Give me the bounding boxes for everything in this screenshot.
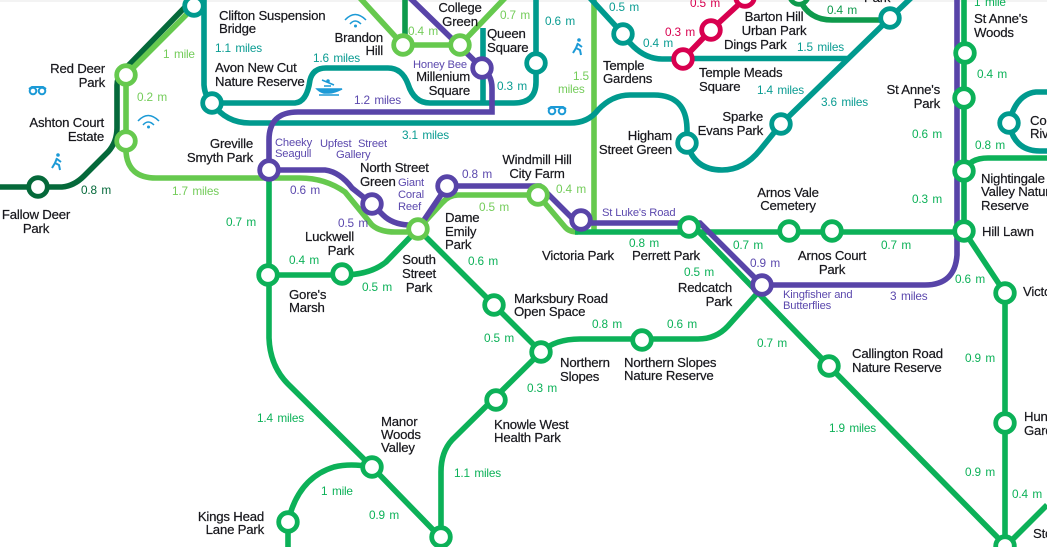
distances: light green: 1.5	[573, 69, 589, 83]
station: Arnos Court Park: Park	[819, 262, 846, 277]
station: Conham River (cropped)	[1000, 113, 1047, 141]
distances: green: 0.5 m	[362, 280, 392, 294]
station: Arnos Vale Cemetery: Arnos Vale	[757, 185, 819, 200]
icon: binoculars	[548, 107, 566, 114]
station: Redcatch Park	[678, 276, 771, 309]
distances: purple: 1.2 miles	[354, 93, 401, 107]
distances: green: 0.5 m	[684, 265, 714, 279]
icon: binoculars	[29, 87, 46, 94]
station: Northern Slopes: Slopes	[560, 369, 600, 384]
station: Fallow Deer Park	[2, 178, 71, 236]
station: Victoria Park: Victoria Park	[542, 248, 615, 263]
station: Sparke Evans Park: Evans Park	[698, 123, 764, 138]
line: green Manor Woods loop	[288, 465, 372, 547]
station: Higham Street Green	[599, 128, 696, 157]
station: Barton Hill Urban Park: Barton Hill	[745, 9, 804, 24]
distances: purple: 0.6 m	[290, 183, 320, 197]
station: Clifton Suspension Bridge: Bridge	[219, 21, 256, 36]
station: Millenium Square: Millenium	[416, 69, 470, 84]
station: Avon New Cut Nature Reserve: Avon New Cut	[215, 60, 297, 75]
station: Northern Slopes Nature Reserve: Nature Reserve	[624, 368, 714, 383]
station: Victoria Park	[542, 211, 615, 263]
distances: teal: 0.4 m	[643, 36, 673, 50]
station: Greville Smyth Park	[187, 136, 278, 179]
distances: teal: 3.6 miles	[821, 95, 868, 109]
line: green Greville to Bottom	[269, 170, 443, 540]
distances: green: 0.8 m	[975, 138, 1005, 152]
line: green Gore's to South Street	[269, 229, 541, 352]
distances: purple: 0.8 m	[462, 167, 492, 181]
distances: dark green: 0.4 m	[827, 3, 857, 17]
wildlife label: Giant Coral Reef: Reef	[398, 201, 422, 213]
distances: green: 0.6 m	[667, 317, 697, 331]
station: Marksbury Road Open Space: Open Space	[514, 304, 585, 319]
station: Callington Road Nature Reserve: Nature Reserve	[852, 360, 942, 375]
distances: green: 0.7 m	[733, 238, 763, 252]
station: Windmill Hill City Farm: Windmill Hill	[502, 152, 572, 167]
distances: green: 1.4 miles	[257, 411, 304, 425]
distances: green: 0.9 m	[369, 508, 399, 522]
station: Greville Smyth Park: Greville	[210, 136, 253, 151]
wildlife label: Upfest Street Gallery: Gallery	[336, 149, 371, 161]
line: green Nightingale branch	[964, 158, 1047, 171]
station: Marksbury Road Open Space	[485, 291, 608, 319]
distances: purple: 0.5 m	[338, 216, 368, 230]
station: Arnos Vale Cemetery: Cemetery	[760, 198, 816, 213]
station: Ashton Court Estate: Estate	[68, 129, 104, 144]
station: St Anne's Woods	[956, 11, 1028, 62]
wildlife label: Giant Coral Reef: Coral	[398, 189, 424, 201]
icon: wifi	[138, 116, 159, 128]
station: College Green	[438, 0, 482, 54]
station: Manor Woods Valley: Valley	[381, 440, 415, 455]
distances: teal: 0.6 m	[545, 14, 575, 28]
wildlife label: Honey Bee: Honey Bee	[413, 59, 467, 71]
icon: walking person	[573, 38, 582, 55]
distances: light green: 1.7 miles	[172, 184, 219, 198]
line: dark green Brandon Hill spur	[402, 0, 408, 45]
line: teal Coombe river	[1009, 92, 1047, 151]
station: Nightingale Valley Nature Reserve: Reserve	[981, 198, 1029, 213]
station: Luckwell Park: Park	[328, 243, 355, 258]
line: green lower right diagonal	[1005, 505, 1047, 547]
station: North Street Green: Green	[360, 174, 396, 189]
station: Hill Lawn	[955, 222, 1034, 240]
distances: green: 0.6 m	[955, 272, 985, 286]
wildlife label: Cheeky Seagull: Cheeky	[275, 137, 313, 149]
station: St Anne's Park	[886, 82, 973, 111]
icon: wifi	[345, 14, 366, 28]
station: Perrett Park: Perrett Park	[632, 248, 701, 263]
distances: light green: miles	[558, 82, 585, 96]
distances: crimson: 0.3 m	[665, 25, 695, 39]
station: Millenium Square	[416, 59, 491, 98]
station: Dame Emily Park	[438, 177, 479, 252]
station: Manor Woods Valley: Manor	[381, 414, 418, 429]
station: Kings Head Lane Park: Kings Head	[198, 509, 264, 524]
station: Arnos Court Park: Arnos Court	[798, 248, 867, 263]
station: Redcatch Park: Redcatch	[678, 280, 732, 295]
station: Kings Head Lane Park: Lane Park	[206, 522, 265, 537]
station: South Street Park: South	[402, 252, 436, 267]
station: Avon New Cut Nature Reserve	[203, 60, 305, 112]
station: Red Deer Park: Red Deer	[50, 61, 106, 76]
station: top mid-green node	[790, 0, 808, 4]
station: Dings Park	[702, 21, 787, 52]
station: Luckwell Park	[305, 229, 355, 283]
distances: green: 0.4 m	[1012, 487, 1042, 501]
station: South Street Park	[402, 220, 437, 295]
line: teal Temple Gardens	[590, 0, 683, 59]
station: Sparke Evans Park: Sparke	[722, 109, 763, 124]
station: Marksbury Road Open Space: Marksbury Road	[514, 291, 608, 306]
distances: green: 0.7 m	[881, 238, 911, 252]
distances: green: 0.7 m	[757, 336, 787, 350]
distances: green: 0.3 m	[912, 192, 942, 206]
station: Fallow Deer Park: Fallow Deer	[2, 207, 71, 222]
distances: light green	[137, 8, 589, 214]
line: dark green	[0, 2, 190, 187]
distances: green: 0.7 m	[226, 215, 256, 229]
line: light green Red Deer branch	[126, 4, 578, 232]
station: Gore's Marsh: Marsh	[289, 300, 325, 315]
wildlife label: Upfest Street Gallery: Street	[358, 138, 388, 150]
station: Luckwell Park: Luckwell	[305, 229, 354, 244]
station: Queen Square: Queen	[487, 26, 526, 41]
distances: light green: 0.4 m	[556, 182, 586, 196]
icon: kayak	[317, 79, 342, 95]
line: crimson	[683, 0, 750, 59]
wildlife label: St Luke's Road: St Luke's Road	[602, 207, 675, 219]
distances: green: 1.9 miles	[829, 421, 876, 435]
station: Knowle West Health Park: Health Park	[494, 430, 561, 445]
station: Higham Street Green: Street Green	[599, 142, 672, 157]
station: North Street Green: North Street	[360, 160, 429, 175]
station: Kings Head Lane Park	[198, 509, 297, 537]
distances: teal	[215, 0, 868, 142]
station: Northern Slopes Nature Reserve: Northern Slopes	[624, 355, 717, 370]
wildlife label: Giant Coral Reef	[398, 177, 425, 213]
line: teal long route	[212, 0, 912, 170]
line: green Knowle West	[441, 352, 541, 537]
distances: green: 0.9 m	[965, 465, 995, 479]
distances: green: 1 mile	[321, 484, 353, 498]
station: Arnos Vale Cemetery	[757, 185, 819, 240]
station: Northern Slopes	[532, 343, 610, 384]
station: Greville Smyth Park: Smyth Park	[187, 150, 254, 165]
line: light green vertical	[591, 0, 597, 232]
station: Brandon Hill: Brandon	[335, 30, 383, 45]
station: Dame Emily Park: Park	[445, 237, 472, 252]
distances: green	[226, 0, 1042, 522]
station: Callington Road Nature Reserve	[820, 346, 943, 375]
station: Temple Meads Square	[674, 50, 783, 94]
line: purple West	[269, 0, 957, 285]
station: Temple Meads Square: Temple Meads	[699, 65, 783, 80]
station: Temple Gardens: Temple	[603, 58, 644, 73]
distances: green: 0.8 m	[629, 236, 659, 250]
distances: teal: 1.1 miles	[215, 41, 262, 55]
station: Avon New Cut Nature Reserve: Nature Reserve	[215, 74, 305, 89]
wildlife label: Cheeky Seagull: Seagull	[275, 148, 311, 160]
station: Dame Emily Park: Emily	[445, 224, 477, 239]
wildlife label: Kingfisher and Butterflies: Kingfisher and	[783, 289, 852, 301]
distances: light green: 0.4 m	[408, 24, 438, 38]
line: green Perrett to Stockwood	[700, 233, 1005, 545]
station: Windmill Hill City Farm: City Farm	[509, 166, 565, 181]
station: lower junction	[432, 528, 450, 546]
distances: crimson	[665, 0, 720, 39]
station: Temple Meads Square: Square	[699, 79, 740, 94]
line: green Northern Slopes	[541, 288, 762, 352]
station: Knowle West Health Park: Knowle West	[494, 417, 569, 432]
station: Redcatch Park: Park	[706, 294, 733, 309]
distances: green: 0.6 m	[468, 254, 498, 268]
distances: green: 0.4 m	[289, 253, 319, 267]
station: Millenium Square: Square	[429, 83, 470, 98]
distances: light green: 0.5 m	[479, 200, 509, 214]
station: Arnos Court Park	[798, 222, 867, 277]
station: Stockwood (cropped)	[996, 526, 1047, 547]
station: Hungerford Gardens (cropped)	[996, 409, 1047, 438]
distances: purple: 3 miles	[890, 289, 928, 303]
station: Clifton Suspension Bridge	[185, 0, 325, 36]
wildlife label: Kingfisher and Butterflies: Butterflies	[783, 300, 832, 312]
station: St Anne's Park: St Anne's	[886, 82, 941, 97]
station: Dame Emily Park: Dame	[445, 210, 479, 225]
station: Perrett Park	[632, 218, 701, 263]
line: teal Clifton	[204, 0, 536, 103]
station: Red Deer Park	[50, 61, 135, 90]
distances: green: 0.3 m	[527, 381, 557, 395]
station: St Anne's Woods: Woods	[974, 25, 1014, 40]
distances: green: 1.1 miles	[454, 466, 501, 480]
distances: green: 0.9 m	[965, 351, 995, 365]
station: Queen Square: Square	[487, 40, 528, 55]
line: mid green	[799, 0, 890, 20]
wildlife label: Kingfisher and Butterflies	[783, 289, 852, 312]
station: Ashton Court Estate: Ashton Court	[29, 115, 105, 130]
station: Hill Lawn: Hill Lawn	[982, 224, 1034, 239]
station: top right teal node	[864, 0, 899, 27]
station: Northern Slopes Nature Reserve	[624, 331, 717, 383]
wildlife label: Cheeky Seagull	[275, 137, 313, 160]
station: North Street Green	[360, 160, 429, 213]
distances: dark green: 0.8 m	[81, 183, 111, 197]
station: Manor Woods Valley: Woods	[381, 427, 421, 442]
line: green East	[575, 0, 964, 232]
station: Barton Hill Urban Park: Urban Park	[742, 23, 807, 38]
station: Temple Gardens	[603, 25, 653, 86]
station: Brandon Hill: Hill	[365, 43, 383, 58]
distances: teal: 0.3 m	[497, 79, 527, 93]
line: teal 1.5 miles	[683, 56, 848, 61]
station: Dings Park: Dings Park	[724, 37, 787, 52]
station: Nightingale Valley Nature Reserve	[955, 162, 1047, 213]
station: Nightingale Valley Nature Reserve: Nightingale	[981, 171, 1045, 186]
distances: teal: 1.6 miles	[313, 51, 360, 65]
distances: light green: 1 mile	[163, 47, 195, 61]
distances: green: 0.5 m	[484, 331, 514, 345]
station: St Anne's Woods: St Anne's	[974, 11, 1028, 26]
line: teal Queen Square spur	[480, 28, 486, 104]
station: Clifton Suspension Bridge: Clifton Suspension	[219, 8, 325, 23]
station: Fallow Deer Park: Park	[23, 221, 50, 236]
distances: dark green	[81, 3, 857, 197]
station: Knowle West Health Park	[487, 391, 569, 445]
wildlife label: Giant Coral Reef: Giant	[398, 177, 425, 189]
station: Gore's Marsh	[259, 266, 327, 315]
distances: teal: 3.1 miles	[402, 128, 449, 142]
station: South Street Park: Street	[402, 266, 437, 281]
station: College Green: Green	[442, 14, 478, 29]
distances: green: 0.4 m	[977, 67, 1007, 81]
station: Brandon Hill	[335, 30, 412, 58]
distances: purple: 0.9 m	[750, 256, 780, 270]
distances: light green: 0.2 m	[137, 90, 167, 104]
station: Victoria (cropped)	[996, 284, 1047, 302]
station: Gore's Marsh: Gore's	[289, 287, 327, 302]
station: South Street Park: Park	[406, 280, 433, 295]
distances: light green: 0.7 m	[500, 8, 530, 22]
station: Manor Woods Valley	[363, 414, 421, 476]
station: Windmill Hill City Farm	[502, 152, 572, 204]
station: Red Deer Park: Park	[79, 75, 106, 90]
wildlife label: Upfest Street Gallery: Upfest	[320, 138, 352, 150]
distances: teal: 1.4 miles	[757, 83, 804, 97]
station: Temple Gardens: Gardens	[603, 71, 653, 86]
wildlife label: Upfest Street Gallery	[320, 138, 388, 161]
distances: green: 0.8 m	[592, 317, 622, 331]
line: light green Brandon Hill to College Green	[360, 0, 505, 45]
icon: walking person	[52, 153, 61, 170]
distances: teal: 0.5 m	[609, 0, 639, 14]
station: Sparke Evans Park	[698, 109, 790, 138]
station: Queen Square	[487, 26, 545, 72]
station: Higham Street Green: Higham	[628, 128, 672, 143]
line: green Hill Lawn to Stockwood	[964, 231, 1005, 547]
station: College Green: College	[438, 0, 482, 15]
station: Callington Road Nature Reserve: Callington Road	[852, 346, 943, 361]
distances: purple	[290, 93, 928, 303]
station: Ashton Court Estate	[29, 115, 135, 150]
station: Barton Hill Urban Park	[736, 0, 807, 38]
distances: teal: 1.5 miles	[797, 40, 844, 54]
station: Northern Slopes: Northern	[560, 355, 610, 370]
distances: green: 0.6 m	[912, 127, 942, 141]
station: St Anne's Park: Park	[914, 96, 941, 111]
